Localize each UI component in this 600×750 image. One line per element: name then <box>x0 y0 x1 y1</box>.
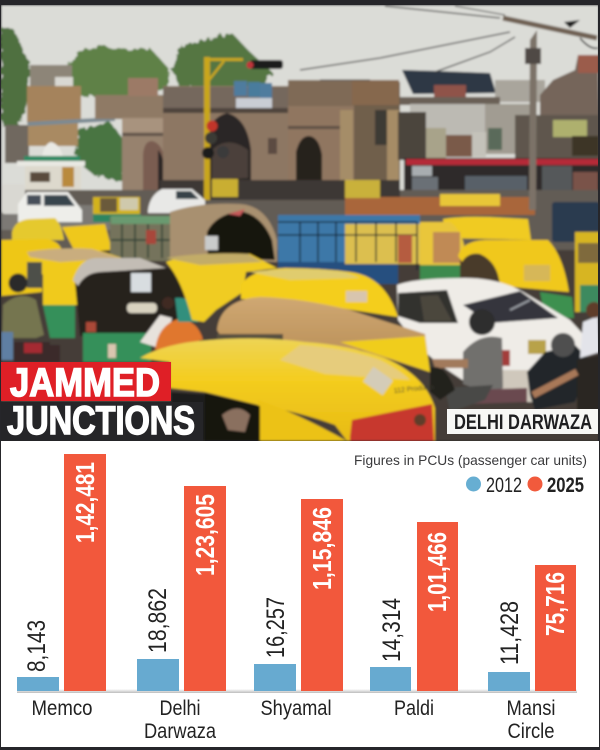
group: Paldi: Paldi <box>394 697 434 720</box>
motorcycles and riders, bottom right <box>527 302 600 412</box>
small white cars <box>1 184 205 222</box>
right buildings <box>402 70 496 94</box>
blue truck <box>278 215 465 284</box>
legend <box>466 474 584 497</box>
group: Memco: Memco <box>32 697 92 720</box>
passengers with teal scarf <box>140 297 203 350</box>
group: Mansi Circle <box>488 565 576 743</box>
large right yellow auto <box>458 240 574 318</box>
shrine <box>17 142 85 192</box>
yellow auto with side lettering <box>166 254 277 322</box>
signal mast <box>202 57 283 200</box>
unit note: Figures in PCUs (passenger car units) <box>354 452 587 468</box>
group: Memco: 8,143 <box>23 620 51 672</box>
group: Delhi Darwaza: 1,23,605 <box>190 494 220 576</box>
gate building <box>122 80 400 198</box>
group: Mansi Circle: Circle <box>508 720 554 743</box>
motorcyclist in grey shirt <box>430 309 527 412</box>
group: Mansi Circle: Mansi <box>506 697 556 720</box>
group: Delhi Darwaza <box>137 486 226 743</box>
group: Shyamal: 16,257 <box>262 597 290 658</box>
blue vehicle, right <box>552 202 600 242</box>
lower photo base <box>1 250 599 441</box>
motorcycle rider, left <box>1 274 60 362</box>
wires <box>300 6 515 80</box>
headline: JUNCTIONS: JUNCTIONS <box>7 399 195 443</box>
utility pole <box>503 18 598 210</box>
trees behind gate <box>1 27 272 182</box>
white car <box>397 278 584 402</box>
yellow and green auto, left <box>27 248 122 338</box>
group: Delhi Darwaza: Delhi <box>160 697 200 720</box>
far-left yellow auto <box>1 239 62 296</box>
tarp-covered auto with dark opening <box>170 204 277 262</box>
group: Mansi Circle: 75,716 <box>540 572 570 636</box>
green cargo rack <box>110 216 177 261</box>
gate signboards <box>234 81 272 108</box>
group: Memco: 1,42,481 <box>70 462 100 543</box>
long yellow auto roof <box>241 268 398 317</box>
street level background <box>1 190 600 250</box>
group: Delhi Darwaza: 18,862 <box>144 588 172 653</box>
foreground yellow auto: 112 Products <box>393 384 435 395</box>
headline: JAMMED: JAMMED <box>10 361 160 405</box>
group: Memco <box>17 454 106 720</box>
group: Paldi: 1,01,466 <box>422 532 452 612</box>
group: Paldi: 14,314 <box>378 598 406 662</box>
foreground yellow auto <box>140 338 435 441</box>
group: Shyamal <box>254 499 343 720</box>
legend: 2025 <box>547 474 584 497</box>
group: Delhi Darwaza: Darwaza <box>144 720 216 743</box>
group: Shyamal: 1,15,846 <box>307 507 337 590</box>
photo: traffic jam at Delhi Darwaza <box>1 5 600 441</box>
black and green auto <box>73 258 184 362</box>
group: Shyamal: Shyamal <box>260 697 332 720</box>
red bus <box>402 156 598 192</box>
left buildings <box>30 65 72 87</box>
small yellow auto <box>93 197 141 222</box>
group: Paldi <box>370 522 458 720</box>
legend: 2012 <box>486 474 522 497</box>
group: Mansi Circle: 11,428 <box>496 601 524 665</box>
bar chart <box>17 454 577 743</box>
rear yellow autos <box>12 217 600 312</box>
sky <box>1 5 599 205</box>
tan-roofed auto <box>217 297 430 372</box>
